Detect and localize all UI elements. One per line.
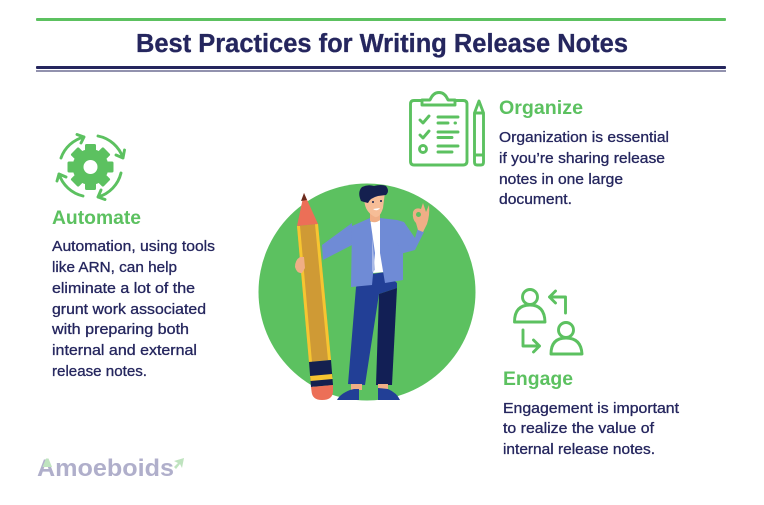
shoes: [337, 389, 359, 400]
hand on pencil: [295, 257, 305, 273]
text block: Automate: eliminate a lot of the: [52, 281, 195, 297]
text block: Automate: [51, 239, 215, 380]
text block: Automate: with preparing both: [51, 322, 189, 338]
text block: Automate: grunt work associated: [52, 302, 206, 318]
left arm: [322, 223, 352, 260]
green circle: [258, 184, 476, 400]
text block: Engage: [503, 401, 679, 458]
heading: Organize: Organize: [499, 98, 583, 119]
heading: Engage: Engage: [503, 369, 573, 390]
title: Best Practices for Writing Release Notes: [136, 30, 628, 58]
text block: Organize: document.: [499, 192, 572, 208]
icon: clipboard checklist and pencil: [410, 92, 484, 165]
central illustration: person holding a giant pencil: [258, 184, 476, 400]
OK hand: [413, 203, 429, 232]
logo: Amoeboids: Amoeboids: [37, 455, 174, 482]
text block: Organize: notes in one large: [499, 172, 623, 188]
giant pencil: [297, 193, 333, 400]
white shirt: [369, 220, 385, 273]
jacket: [351, 218, 375, 287]
heading: Automate: Automate: [52, 208, 141, 229]
face: [372, 201, 374, 203]
text block: Automate: release notes.: [52, 364, 147, 380]
trousers: [348, 272, 397, 385]
neck and head: [370, 208, 380, 222]
text block: Automate: Automation, using tools: [52, 239, 215, 255]
text block: Organize: Organization is essential: [499, 130, 669, 146]
text block: Automate: internal and external: [52, 343, 197, 359]
text block: Engage: to realize the value of: [503, 421, 655, 437]
icon: gear with cycle arrows: [57, 134, 124, 200]
text block: Engage: internal release notes.: [503, 442, 655, 458]
text block: Organize: [499, 130, 669, 208]
right arm: [397, 220, 424, 254]
icon: two people exchanging arrows: [514, 290, 582, 354]
text block: Organize: if you’re sharing release: [499, 151, 665, 167]
ankles: [351, 384, 362, 390]
hair: [359, 185, 388, 203]
text block: Automate: like ARN, can help: [52, 260, 177, 276]
text block: Engage: Engagement is important: [503, 401, 679, 417]
